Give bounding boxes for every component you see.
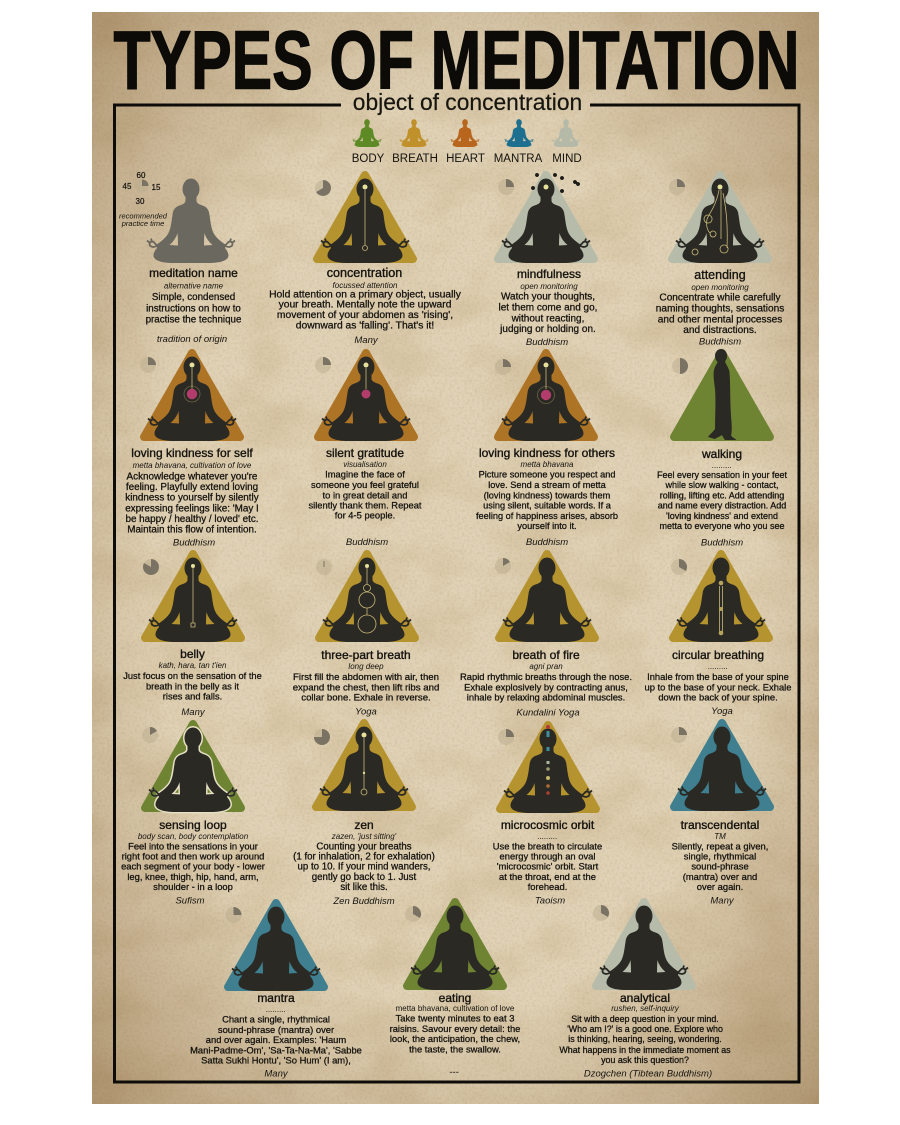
origin: Dzogchen (Tibtean Buddhism): [584, 1068, 712, 1080]
description: leg, knee, thigh, hip, hand, arm,: [127, 871, 259, 882]
icon: mantra triangle figure: [228, 903, 324, 991]
icon: heart triangle figure: [498, 353, 594, 441]
panel: transcendental: [671, 723, 770, 906]
description: your breath. Mentally note the upward: [279, 300, 452, 310]
description: kindness to yourself by silently: [125, 492, 259, 504]
alternative name: agni pran: [529, 662, 563, 671]
description: Inhale from the base of your spine: [647, 671, 789, 682]
description: Watch your thoughts,: [501, 292, 595, 302]
description: and over again. Examples: 'Haum: [206, 1034, 346, 1045]
description: expressing feelings like: 'May I: [125, 504, 259, 514]
description: to in great detail and: [323, 490, 407, 500]
icon: practice time clock key: [136, 180, 148, 192]
origin: Many: [710, 896, 735, 906]
icon: breath triangle figure with chakras: [500, 725, 596, 813]
description: metta to everyone who you see: [659, 521, 785, 531]
origin: Buddhism: [699, 336, 741, 348]
icon: grey figure: [147, 178, 235, 263]
description: collar bone. Exhale in reverse.: [301, 692, 431, 704]
origin: tradition of origin: [157, 334, 227, 345]
alternative name: long deep: [348, 662, 384, 671]
description: Picture someone you respect and: [479, 470, 615, 480]
heading: walking: [701, 447, 742, 461]
origin: Buddhism: [346, 537, 388, 548]
icon: mind triangle figure with paths: [672, 175, 768, 263]
description: Concentrate while carefully: [659, 292, 782, 304]
description: Just focus on the sensation of the: [123, 671, 262, 681]
description: expand the chest, then lift ribs and: [293, 682, 439, 694]
practice time clock: [498, 179, 514, 195]
legend item: breath: [392, 119, 438, 165]
description: the taste, the swallow.: [409, 1044, 501, 1054]
origin: Buddhism: [701, 538, 743, 548]
description: someone you feel grateful: [311, 479, 419, 490]
description: energy through an oval: [500, 850, 595, 862]
description: instructions on how to: [146, 304, 241, 314]
icon: body triangle figure: [407, 902, 503, 990]
description: Imagine the face of: [325, 468, 405, 480]
description: Feel every sensation in your feet: [657, 470, 788, 480]
panel: eating: [390, 902, 520, 1078]
panel: walking: [657, 349, 788, 548]
practice time clock: [314, 729, 330, 745]
alternative name: TM: [714, 832, 726, 841]
description: rolling, lifting etc. Add attending: [660, 490, 784, 500]
panel: three-part breath: [293, 554, 439, 718]
description: raisins. Savour every detail: the: [390, 1023, 520, 1034]
panel: attending: [656, 175, 784, 348]
heading: belly: [180, 647, 205, 661]
description: for 4-5 people.: [335, 510, 395, 520]
description: let them come and go,: [499, 302, 597, 314]
clock key numbers: 15: [152, 183, 161, 192]
icon: breath triangle figure: [145, 554, 241, 642]
alternative name: open monitoring: [691, 283, 749, 292]
heading: circular breathing: [672, 648, 764, 662]
icon: breath triangle figure: [673, 554, 769, 642]
origin: Many: [354, 335, 379, 346]
description: is thinking, hearing, seeing, wondering.: [568, 1034, 722, 1044]
subtitle: object of concentration: [353, 89, 582, 115]
practice time clock: [669, 179, 685, 195]
recommended practice time note: practice time: [121, 219, 164, 228]
description: breath in the belly as it: [146, 682, 239, 692]
description: down the back of your spine.: [658, 692, 778, 702]
description: right foot and then work up around: [122, 850, 264, 862]
description: (loving kindness) towards them: [484, 490, 611, 500]
icon: body triangle walking figure: [674, 349, 770, 440]
heading: mindfulness: [517, 267, 581, 281]
description: without reacting,: [511, 314, 584, 324]
practice time clock: [671, 727, 687, 743]
description: while slow walking - contact,: [664, 480, 779, 490]
description: be happy / healthy / loved' etc.: [125, 514, 259, 525]
heading: mantra: [257, 991, 295, 1005]
description: First fill the abdomen with air, then: [293, 672, 439, 683]
description: and other mental processes: [658, 314, 782, 326]
alternative name: alternative name: [164, 282, 224, 290]
panel: sensing loop: [121, 724, 265, 906]
icon: mind triangle figure with thoughts: [498, 173, 594, 263]
origin: Many: [181, 707, 206, 718]
description: love. Send a stream of metta: [488, 480, 607, 490]
practice time clock: [142, 727, 158, 743]
icon: breath triangle figure: [317, 175, 413, 263]
description: inhale by relaxing abdominal muscles.: [467, 692, 625, 702]
practice time clock: [498, 729, 514, 745]
practice time clock: [143, 559, 159, 575]
legend item: mantra: MANTRA: [494, 153, 543, 165]
description: 'loving kindness' and extend: [666, 511, 778, 521]
description: Satta Sukhi Hontu', 'So Hum' (I am),: [201, 1054, 351, 1066]
description: Silently, repeat a given,: [672, 840, 768, 852]
description: Rapid rhythmic breaths through the nose.: [460, 671, 632, 682]
alternative name: open monitoring: [520, 282, 578, 291]
panel: silent gratitude: [308, 353, 422, 548]
description: Use the breath to circulate: [493, 840, 602, 852]
description: up to 10. If your mind wanders,: [297, 862, 431, 872]
panel: belly: [123, 554, 262, 718]
practice time clock: [140, 357, 156, 373]
description: Sit with a deep question in your mind.: [571, 1014, 719, 1024]
origin: Yoga: [355, 706, 377, 718]
description: over again.: [697, 881, 743, 892]
description: using silent, suitable words. If a: [483, 500, 612, 510]
heading: three-part breath: [321, 648, 411, 662]
origin: Buddhism: [526, 337, 568, 348]
description: rises and falls.: [163, 692, 222, 702]
description: shoulder - in a loop: [153, 881, 233, 892]
panel: circular breathing: [645, 554, 791, 717]
alternative name: .........: [537, 832, 558, 841]
description: What happens in the immediate moment as: [559, 1045, 731, 1055]
description: at the throat, end at the: [499, 871, 596, 882]
description: judging or holding on.: [499, 324, 596, 335]
description: sound-phrase (mantra) over: [218, 1024, 334, 1035]
alternative name: metta bhavana, cultivation of love: [396, 1004, 515, 1013]
alternative name: .........: [712, 461, 732, 470]
description: Hold attention on a primary object, usually: [269, 290, 462, 300]
icon: heart triangle figure: [144, 353, 240, 441]
description: each segment of your body - lower: [121, 860, 265, 872]
origin: Taoism: [535, 896, 565, 906]
alternative name: metta bhavana, cultivation of love: [133, 461, 252, 470]
alternative name: body scan, body contemplation: [138, 832, 249, 841]
practice time clock: [495, 359, 511, 375]
practice time clock: [226, 907, 242, 923]
icon: heart triangle figure: [318, 353, 414, 441]
origin: Zen Buddhism: [332, 896, 395, 907]
origin: Buddhism: [173, 538, 215, 548]
origin: ---: [449, 1067, 459, 1078]
heading: analytical: [620, 991, 670, 1005]
practice time clock: [316, 559, 332, 575]
heading: meditation name: [149, 266, 238, 280]
alternative name: .........: [708, 662, 728, 671]
panel: mindfulness: [498, 173, 597, 348]
panel: analytical: [559, 902, 731, 1080]
heading: breath of fire: [512, 648, 580, 662]
practice time clock: [405, 906, 421, 922]
description: forehead.: [528, 881, 567, 892]
description: Chant a single, rhythmical: [222, 1014, 330, 1024]
description: Take twenty minutes to eat 3: [396, 1012, 514, 1024]
alternative name: kath, hara, tan t'ien: [159, 661, 227, 670]
description: Maintain this flow of intention.: [127, 524, 257, 536]
practice time clock: [672, 358, 688, 374]
panel: loving kindness for others: [476, 353, 618, 548]
description: 'microcosmic' orbit. Start: [497, 860, 599, 872]
panel: key / meditation name: [119, 171, 242, 345]
description: Feel into the sensations in your: [128, 840, 258, 852]
heading: concentration: [327, 266, 402, 280]
practice time clock: [593, 905, 609, 921]
panel: loving kindness for self: [125, 353, 259, 548]
practice time clock: [495, 558, 511, 574]
heading: microcosmic orbit: [501, 818, 595, 832]
legend item: heart: [446, 119, 485, 165]
description: yourself into it.: [517, 521, 577, 531]
practice time clock: [315, 180, 331, 196]
description: sound-phrase: [691, 860, 749, 872]
origin: Kundalini Yoga: [516, 708, 580, 718]
alternative name: metta bhavana: [521, 460, 574, 469]
legend item: breath: BREATH: [392, 153, 438, 165]
icon: breath triangle figure with circles: [319, 554, 415, 642]
recommended practice time note: recommended: [119, 212, 168, 220]
legend item: heart: HEART: [446, 153, 485, 165]
description: silently thank them. Repeat: [308, 500, 422, 510]
heading: zen: [354, 818, 374, 832]
heading: loving kindness for others: [479, 446, 615, 460]
alternative name: focussed attention: [333, 281, 398, 290]
origin: Yoga: [711, 706, 733, 717]
clock key numbers: 45: [123, 182, 132, 191]
legend item: body: BODY: [352, 153, 385, 165]
alternative name: rushen, self-inquiry: [611, 1004, 680, 1013]
description: and distractions.: [683, 325, 757, 336]
legend item: mantra: [494, 119, 543, 165]
practice time clock: [671, 559, 687, 575]
legend item: body: [352, 119, 385, 165]
description: movement of your abdomen as 'rising',: [277, 310, 453, 321]
legend item: mind: [551, 119, 582, 165]
description: you ask this question?: [601, 1055, 689, 1065]
legend: [352, 119, 582, 165]
heading: eating: [439, 991, 471, 1005]
clock key numbers: 60: [137, 171, 146, 180]
panel: breath of fire: [460, 554, 632, 718]
description: Exhale explosively by contracting anus,: [464, 682, 628, 692]
origin: Many: [264, 1068, 289, 1080]
origin: Buddhism: [526, 537, 568, 548]
panel: microcosmic orbit: [493, 725, 602, 906]
description: naming thoughts, sensations: [656, 304, 784, 314]
icon: breath triangle figure: [499, 554, 595, 642]
description: look, the anticipation, the chew,: [390, 1033, 520, 1044]
description: (mantra) over and: [683, 871, 757, 882]
description: 'Who am I?' is a good one. Explore who: [567, 1024, 723, 1034]
description: up to the base of your neck. Exhale: [645, 682, 791, 692]
description: practise the technique: [146, 314, 242, 326]
description: sit like this.: [340, 882, 388, 893]
legend item: mind: MIND: [552, 153, 582, 165]
heading: silent gratitude: [326, 446, 404, 460]
description: feeling of happiness arises, absorb: [476, 511, 618, 521]
icon: mind triangle figure: [596, 902, 692, 990]
alternative name: visualisation: [343, 460, 387, 469]
description: single, rhythmical: [684, 850, 756, 862]
description: Mani-Padme-Om', 'Sa-Ta-Na-Ma', 'Sabbe: [190, 1044, 362, 1056]
description: downward as 'falling'. That's it!: [296, 320, 434, 332]
heading: sensing loop: [159, 818, 227, 832]
clock key numbers: 30: [136, 197, 145, 206]
description: feeling. Playfully extend loving: [126, 482, 258, 493]
description: and name every distraction. Add: [658, 500, 786, 510]
icon: mantra triangle figure: [674, 723, 770, 811]
alternative name: zazen, 'just sitting': [331, 832, 397, 841]
description: (1 for inhalation, 2 for exhalation): [293, 852, 435, 862]
description: Counting your breaths: [316, 842, 412, 852]
alternative name: .........: [266, 1005, 286, 1014]
icon: body triangle figure with outline: [145, 724, 241, 812]
description: gently go back to 1. Just: [312, 872, 417, 883]
description: Acknowledge whatever you're: [127, 472, 258, 482]
heading: loving kindness for self: [131, 446, 253, 460]
frame: [114, 105, 799, 1082]
panel: concentration: [269, 175, 462, 346]
panel: zen: [293, 723, 435, 907]
panel: mantra: [190, 903, 362, 1080]
icon: breath triangle figure: [316, 723, 412, 811]
origin: Sufism: [175, 896, 205, 906]
heading: attending: [694, 268, 746, 282]
heading: transcendental: [681, 818, 759, 832]
poster background: [92, 12, 819, 1104]
practice time clock: [315, 357, 331, 373]
description: Simple, condensed: [152, 292, 235, 303]
